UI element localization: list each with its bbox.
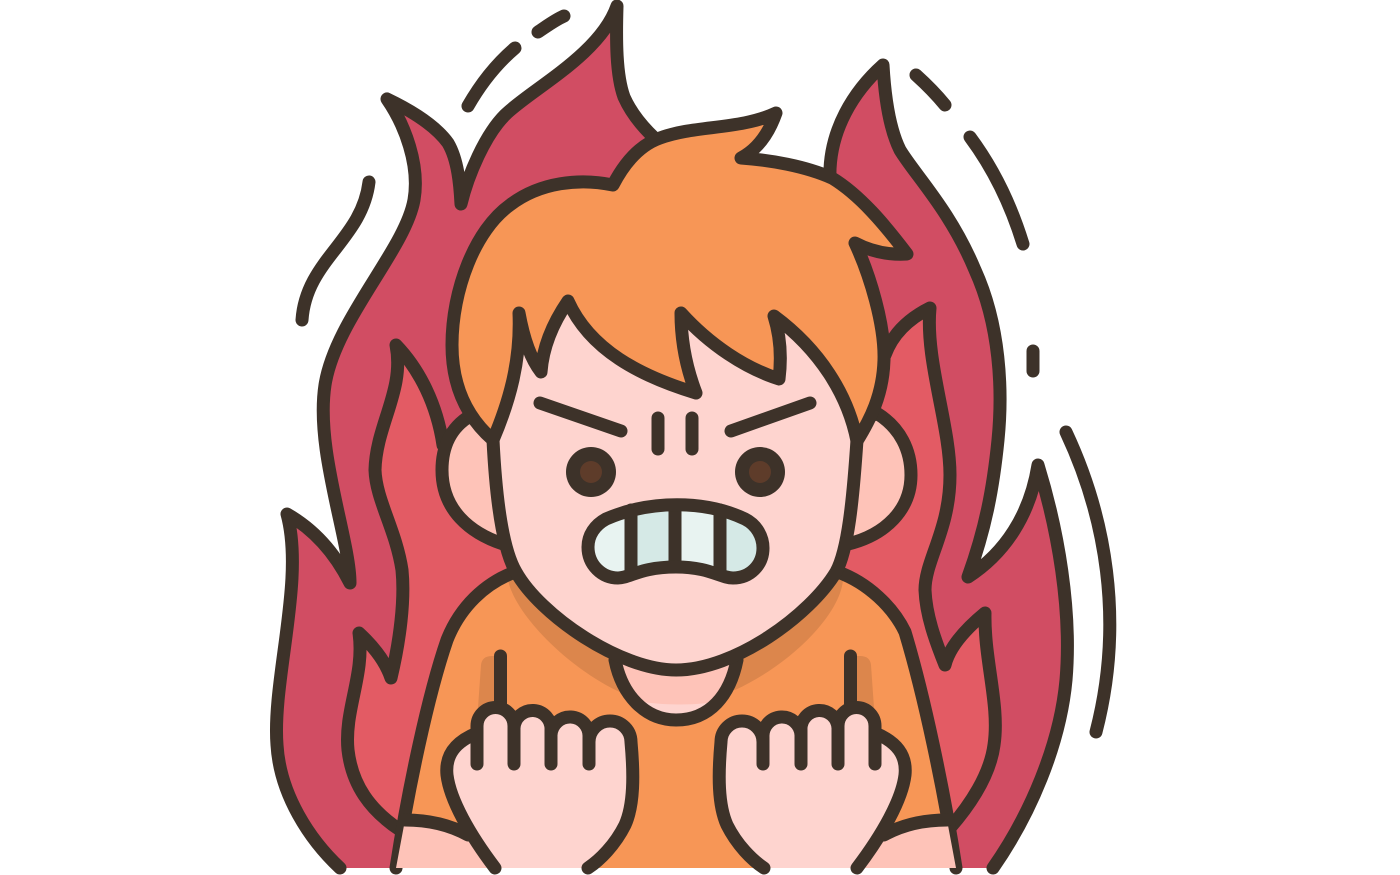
- left hand: [396, 656, 633, 868]
- mouth with clenched teeth: [580, 495, 770, 585]
- left ear: [442, 416, 520, 544]
- inner flame: [347, 308, 995, 868]
- face: [493, 280, 857, 670]
- shirt: [396, 560, 956, 868]
- right hand: [719, 656, 956, 868]
- hair: [452, 113, 907, 441]
- outer flame: [276, 6, 1067, 868]
- right ear: [830, 414, 911, 544]
- neck: [615, 655, 737, 725]
- motion lines: [302, 16, 1110, 732]
- left eye: [566, 447, 616, 497]
- frown lines: [658, 418, 692, 449]
- eyebrows: [540, 403, 810, 431]
- right eye: [735, 447, 785, 497]
